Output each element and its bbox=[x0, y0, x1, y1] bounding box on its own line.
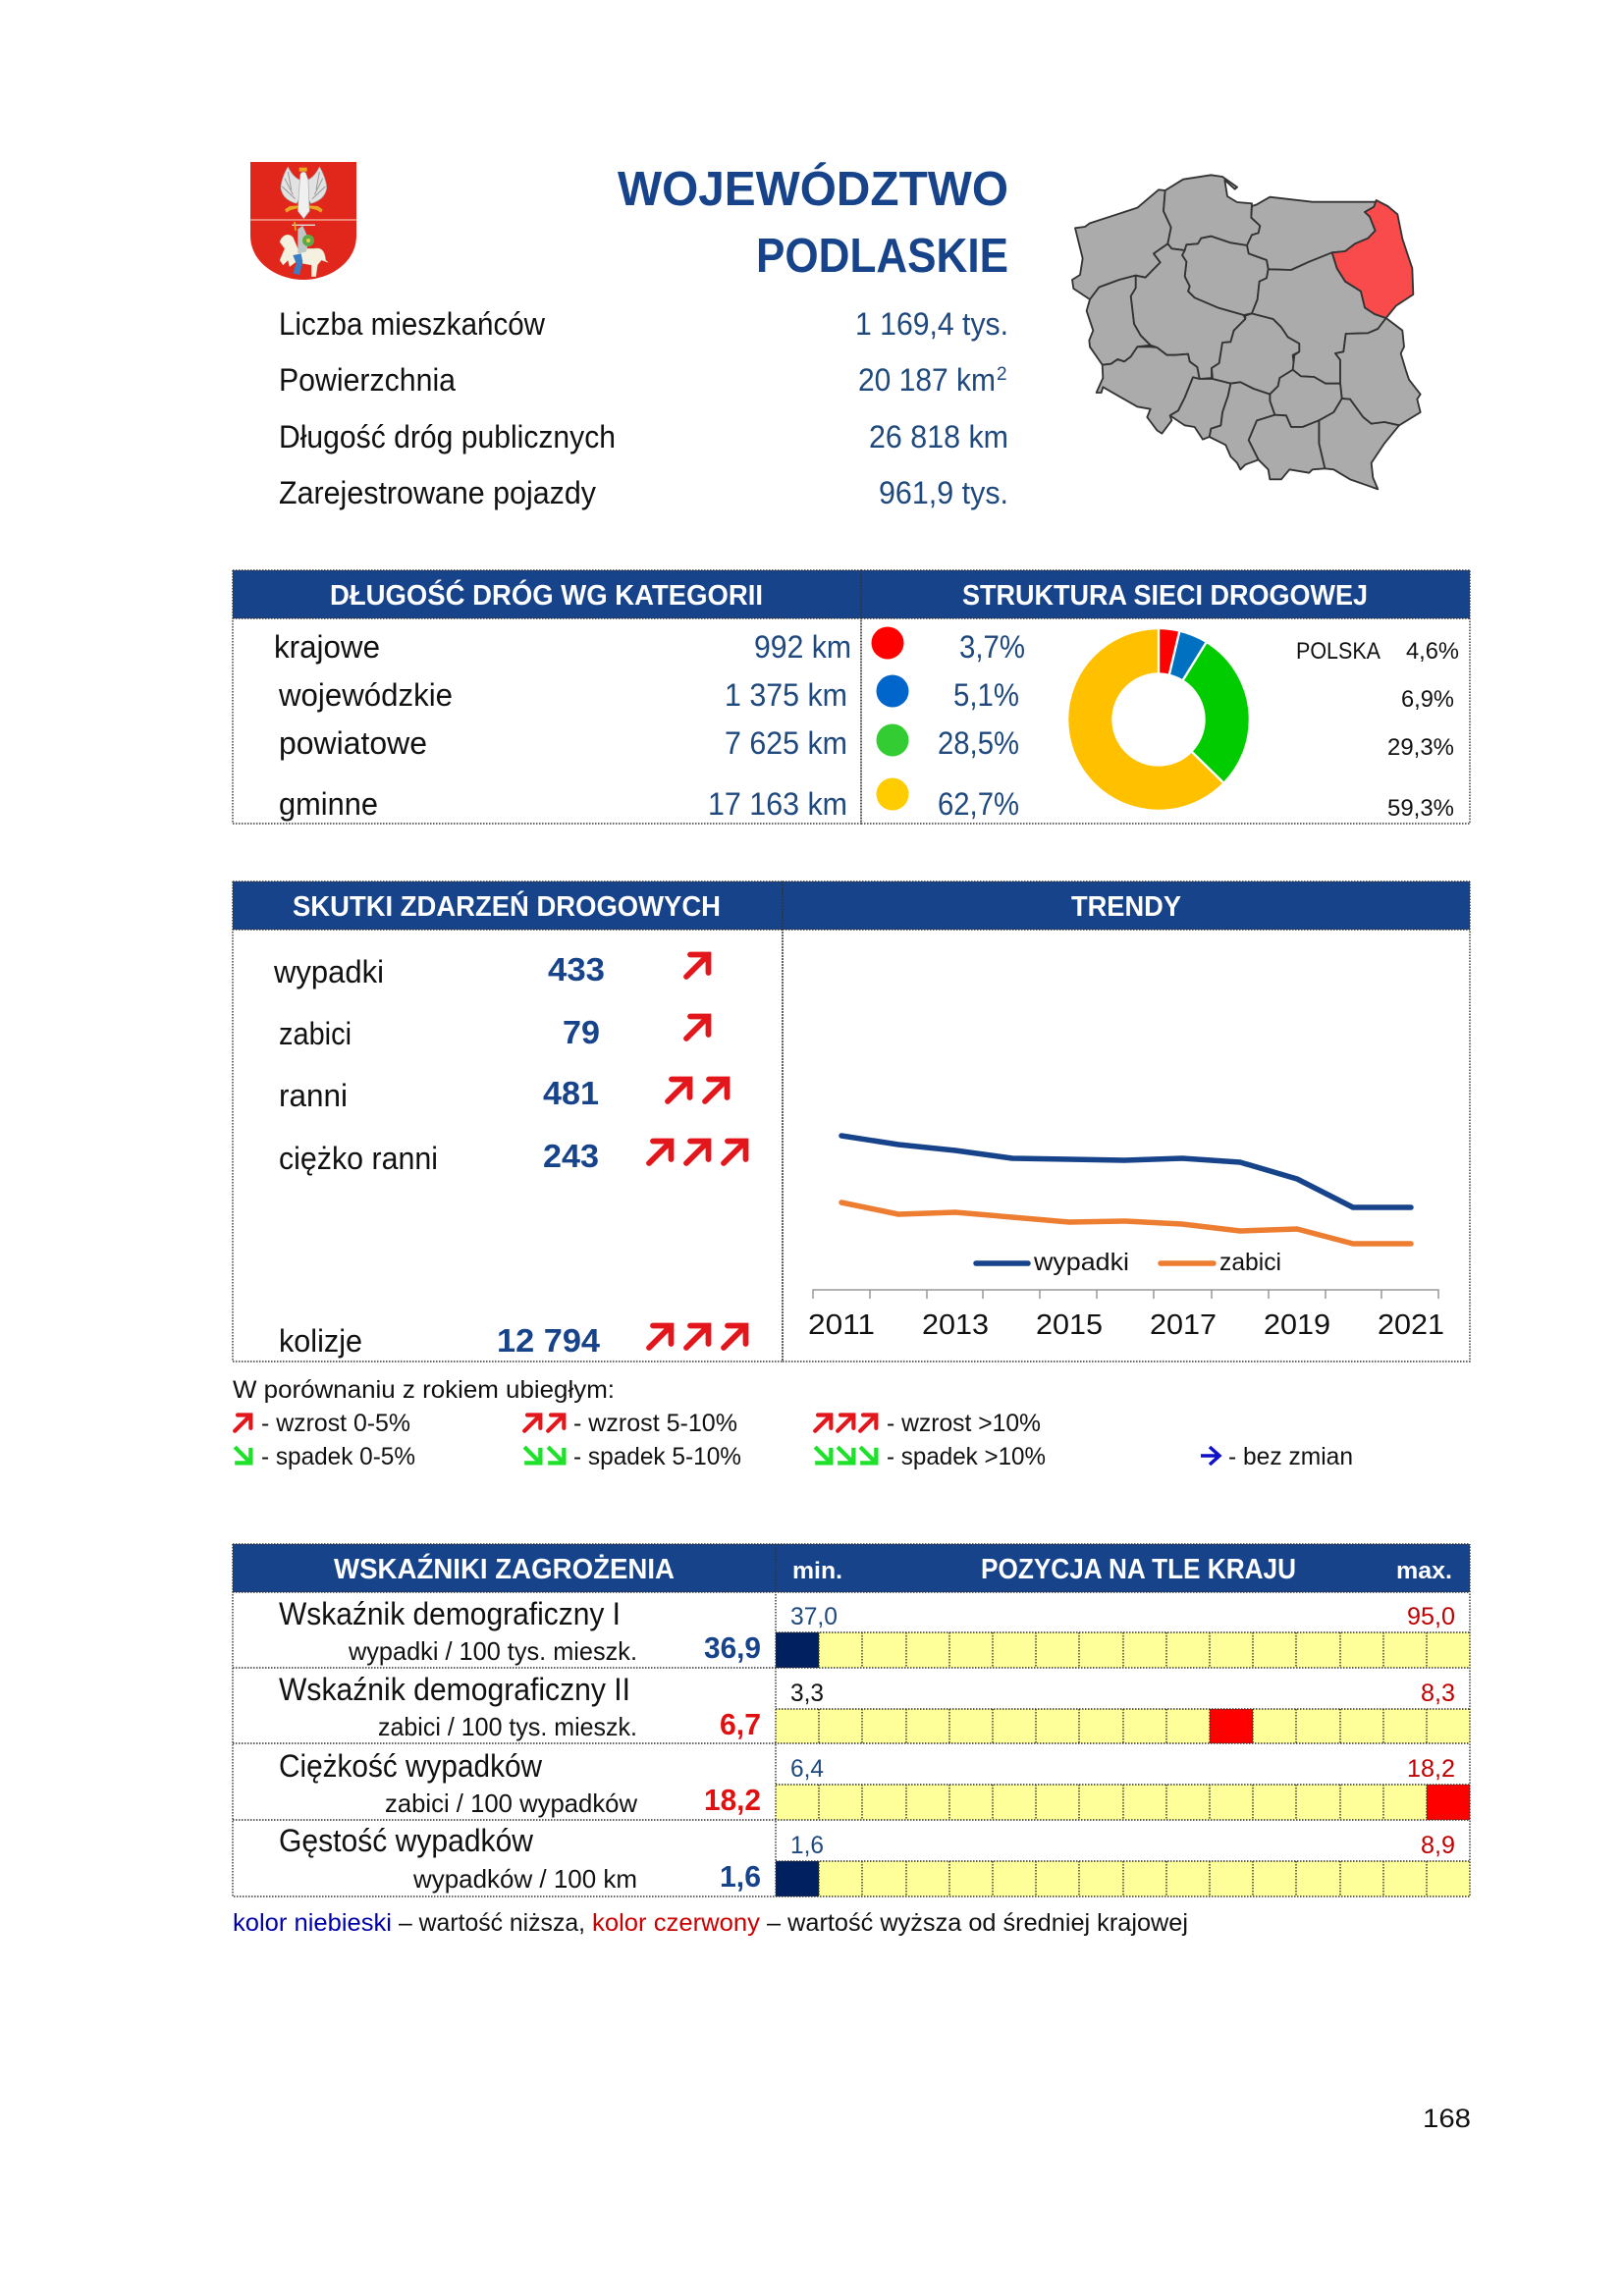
indicator: accident density: 1,6 bbox=[720, 1859, 761, 1894]
legend heading: W porównaniu z rokiem ubiegłym: bbox=[233, 1376, 615, 1404]
legend dots and shares: 5,1% bbox=[953, 677, 1019, 713]
header: road length: DŁUGOŚĆ DRÓG WG KATEGORII bbox=[330, 578, 763, 612]
indicator: accident severity: 6,4 bbox=[790, 1755, 824, 1783]
legend: increase over 10% bbox=[815, 1410, 1041, 1437]
row: powiatowe: 7 625 km bbox=[725, 725, 847, 761]
legend: decrease over 10%: - spadek >10% bbox=[887, 1443, 1046, 1470]
indicator: demographic I: 95,0 bbox=[1407, 1603, 1455, 1630]
indicator: demographic I: 36,9 bbox=[704, 1630, 761, 1665]
indicator: accident density: 1,6 bbox=[790, 1832, 824, 1859]
row: krajowe: krajowe bbox=[274, 629, 380, 665]
colour note bbox=[233, 1909, 1188, 1937]
series: zabici bbox=[841, 1202, 1411, 1244]
indicator: demographic II bbox=[279, 1672, 1455, 1741]
row: wypadki: wypadki bbox=[273, 954, 384, 989]
header: structure bbox=[861, 570, 1470, 618]
header: trends: TRENDY bbox=[1071, 891, 1181, 923]
row: ranni: ranni bbox=[279, 1078, 348, 1113]
x axis: 2019 bbox=[1264, 1309, 1330, 1341]
panel: trends bbox=[783, 881, 1470, 1362]
row: ciężko ranni: 243 bbox=[543, 1138, 599, 1174]
colour note: kolor niebieski bbox=[233, 1909, 392, 1937]
row: gminne: 17 163 km bbox=[708, 786, 847, 822]
legend: increase 0-5%: - wzrost 0-5% bbox=[261, 1410, 410, 1437]
x axis: 2017 bbox=[1150, 1309, 1217, 1341]
row: kolizje bbox=[279, 1322, 746, 1359]
indicator: accident severity bbox=[279, 1748, 1455, 1818]
indicator: accident density bbox=[279, 1823, 1455, 1894]
road length row: Długość dróg publicznych bbox=[279, 419, 616, 454]
area row: 2 bbox=[997, 364, 1007, 385]
row: gminne bbox=[279, 786, 847, 822]
indicator: demographic II: 8,3 bbox=[1421, 1680, 1455, 1707]
title bbox=[618, 162, 1008, 283]
x axis bbox=[808, 1290, 1444, 1341]
legend dots and shares: 28,5% bbox=[938, 725, 1019, 761]
indicator: demographic II: Wskaźnik demograficzny II bbox=[279, 1672, 630, 1707]
basic data list bbox=[279, 306, 1008, 510]
row: wojewódzkie: wojewódzkie bbox=[278, 677, 453, 713]
indicator: accident severity: 18,2 bbox=[1407, 1755, 1455, 1783]
legend dots and shares bbox=[872, 626, 1025, 822]
legend: increase over 10%: - wzrost >10% bbox=[887, 1410, 1041, 1437]
row: ranni: 481 bbox=[543, 1075, 599, 1111]
legend: no change: - bez zmian bbox=[1228, 1443, 1353, 1470]
row: ciężko ranni bbox=[279, 1138, 746, 1176]
row: krajowe: 992 km bbox=[754, 629, 851, 665]
area row bbox=[279, 362, 1007, 398]
row: powiatowe: powiatowe bbox=[279, 725, 427, 761]
page number: 168 bbox=[1423, 2104, 1471, 2133]
indicator: demographic I bbox=[279, 1596, 1455, 1666]
header: risk indicators: max. bbox=[1396, 1558, 1452, 1584]
donut chart bbox=[1090, 627, 1227, 788]
row: kolizje: 12 794 bbox=[497, 1322, 601, 1359]
colour note: kolor czerwony bbox=[592, 1909, 761, 1937]
header: risk indicators bbox=[233, 1544, 1470, 1592]
row: zabici bbox=[279, 1014, 709, 1051]
row: kolizje: kolizje bbox=[279, 1323, 362, 1359]
chart legend: wypadki bbox=[1033, 1249, 1129, 1276]
header: structure: STRUKTURA SIECI DROGOWEJ bbox=[962, 580, 1368, 612]
population row: Liczba mieszkańców bbox=[279, 306, 546, 342]
indicator: demographic II: zabici / 100 tys. mieszk. bbox=[378, 1712, 637, 1741]
national comparison: 29,3% bbox=[1387, 734, 1454, 761]
header: risk indicators: WSKAŹNIKI ZAGROŻENIA bbox=[334, 1552, 675, 1585]
row: zabici: 79 bbox=[563, 1014, 600, 1050]
population row bbox=[279, 306, 1008, 342]
chart legend: zabici bbox=[1219, 1249, 1281, 1276]
row: ranni bbox=[279, 1075, 727, 1113]
x axis: 2013 bbox=[922, 1309, 989, 1341]
road length row bbox=[279, 419, 1008, 454]
row: powiatowe bbox=[279, 725, 847, 761]
x axis: 2015 bbox=[1036, 1309, 1103, 1341]
legend: decrease 0-5%: - spadek 0-5% bbox=[261, 1443, 415, 1470]
colour note: – wartość wyższa od średniej krajowej bbox=[767, 1909, 1188, 1937]
population row: 1 169,4 tys. bbox=[855, 306, 1008, 342]
colour note: – wartość niższa, bbox=[399, 1909, 585, 1937]
row: wypadki bbox=[273, 951, 709, 989]
legend dots and shares: 3,7% bbox=[959, 629, 1025, 665]
vehicles row bbox=[279, 475, 1008, 510]
indicator: demographic II: 3,3 bbox=[790, 1680, 824, 1707]
header: risk indicators: POZYCJA NA TLE KRAJU bbox=[981, 1554, 1296, 1585]
x axis: 2021 bbox=[1378, 1309, 1444, 1341]
indicator: accident severity: Ciężkość wypadków bbox=[279, 1748, 543, 1784]
panel: road length by category bbox=[233, 570, 861, 824]
map of Poland bbox=[1072, 175, 1421, 489]
area row: Powierzchnia bbox=[279, 362, 456, 398]
indicator: accident density: Gęstość wypadków bbox=[279, 1823, 534, 1858]
row: gminne: gminne bbox=[279, 786, 378, 822]
row: zabici: zabici bbox=[279, 1016, 352, 1051]
national comparison: POLSKA bbox=[1296, 638, 1380, 665]
header: effects bbox=[233, 881, 783, 930]
panel: risk indicators bbox=[233, 1544, 1470, 1896]
indicator: accident density: 8,9 bbox=[1421, 1832, 1455, 1859]
legend: decrease 5-10%: - spadek 5-10% bbox=[573, 1443, 741, 1470]
indicator: accident severity: 18,2 bbox=[704, 1783, 761, 1817]
arrow legend bbox=[233, 1376, 1353, 1470]
indicator: demographic I: wypadki / 100 tys. mieszk. bbox=[348, 1636, 637, 1666]
title: PODLASKIE bbox=[756, 230, 1008, 283]
national comparison bbox=[1296, 638, 1459, 822]
row: wojewódzkie: 1 375 km bbox=[725, 677, 847, 713]
row: ciężko ranni: ciężko ranni bbox=[279, 1141, 438, 1176]
indicator: demographic I: Wskaźnik demograficzny I bbox=[279, 1596, 621, 1631]
indicator: accident severity: zabici / 100 wypadków bbox=[385, 1789, 637, 1818]
vehicles row: 961,9 tys. bbox=[879, 475, 1008, 510]
line chart bbox=[808, 1136, 1444, 1341]
national comparison: 59,3% bbox=[1387, 795, 1454, 822]
road length row: 26 818 km bbox=[869, 419, 1008, 454]
header: trends bbox=[783, 881, 1470, 930]
position bars bbox=[776, 1632, 1470, 1896]
national comparison: 4,6% bbox=[1406, 638, 1459, 665]
series: wypadki bbox=[841, 1136, 1411, 1207]
legend: decrease over 10% bbox=[815, 1443, 1046, 1470]
area row: 20 187 km bbox=[858, 362, 996, 398]
vehicles row: Zarejestrowane pojazdy bbox=[279, 475, 596, 510]
row: krajowe bbox=[274, 629, 851, 665]
row: wojewódzkie bbox=[278, 677, 847, 713]
header: road length bbox=[233, 570, 861, 618]
indicator: demographic II: 6,7 bbox=[720, 1707, 761, 1741]
header: effects: SKUTKI ZDARZEŃ DROGOWYCH bbox=[293, 889, 721, 923]
indicator: accident density: wypadków / 100 km bbox=[412, 1864, 637, 1894]
chart legend bbox=[976, 1249, 1281, 1276]
title: WOJEWÓDZTWO bbox=[618, 162, 1008, 216]
indicator: demographic I: 37,0 bbox=[790, 1603, 838, 1630]
header: risk indicators: min. bbox=[792, 1558, 842, 1584]
legend dots and shares: 62,7% bbox=[938, 786, 1019, 822]
x axis: 2011 bbox=[808, 1309, 875, 1341]
national comparison: 6,9% bbox=[1401, 686, 1454, 713]
row: wypadki: 433 bbox=[548, 951, 605, 988]
panel: road network structure bbox=[861, 570, 1470, 824]
panel: effects of road incidents bbox=[233, 881, 783, 1362]
icon: coat of arms bbox=[250, 162, 356, 280]
legend: increase 5-10%: - wzrost 5-10% bbox=[573, 1410, 737, 1437]
